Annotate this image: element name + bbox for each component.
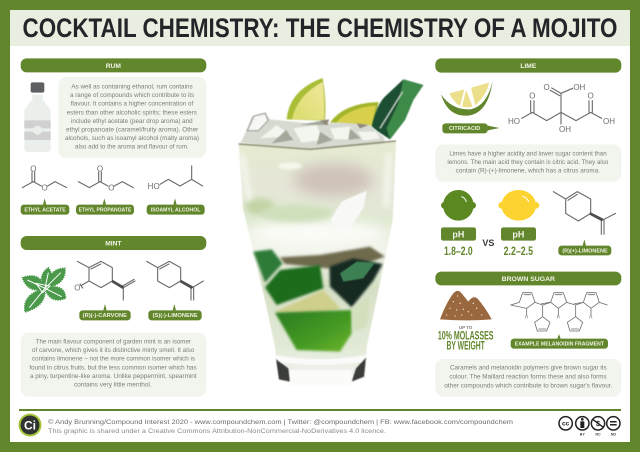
brown sugar heading: [435, 272, 621, 285]
pH badge: lime: [441, 227, 476, 258]
molecule: ethyl acetate: [22, 164, 67, 193]
rum heading: [21, 58, 206, 72]
callout: molasses: UP TO: [459, 325, 472, 331]
rum text block: [58, 77, 206, 158]
molecule: citric acid: [508, 83, 615, 134]
mint text block: The main flavour component of garden mint is an isomer: [36, 339, 191, 345]
rum text block: flavour. It contains a higher concentration of: [71, 102, 194, 108]
icon: rum bottle: [24, 82, 51, 152]
logo: compound interest: [18, 414, 42, 436]
label: (S)-(-)-limonene: (S)(-)-LIMONENE: [153, 313, 198, 319]
mint text block: found in citrus fruits, but the less common isomer which has: [29, 365, 197, 371]
molecule: (S)-(-)-limonene: [147, 261, 203, 300]
label: example melanoidin fragment: EXAMPLE MELANOIDIN FRAGMENT: [515, 341, 605, 347]
brown sugar text block: [435, 359, 621, 397]
label: (S)-(-)-limonene: [148, 304, 202, 320]
molecule: citric acid: HO: [508, 117, 520, 126]
pH badge: lemon: [501, 227, 536, 258]
molecule: carvone: [74, 261, 135, 300]
glass base: [275, 355, 366, 386]
label: (R)-(-)-carvone: [79, 304, 131, 320]
rum text block: include ethyl acetate (pear drop aroma) and: [71, 119, 193, 125]
icons: creative commons licence: $: [596, 419, 601, 428]
brown sugar heading: BROWN SUGAR: [502, 276, 555, 283]
molecule: ethyl propanoate: O: [108, 184, 114, 193]
pH badge: lime: 1.8–2.0: [444, 244, 473, 258]
molecule: ethyl propanoate: O: [97, 164, 103, 173]
molecule: carvone: O: [74, 283, 80, 292]
drink highlights: [242, 153, 389, 246]
brown sugar text block: other compounds which contribute to brown sugar's flavour.: [444, 383, 613, 389]
icon: lemon fruit: [498, 190, 539, 221]
rum text block: a range of compounds which contribute to its: [70, 93, 194, 99]
pH badge: lemon: pH: [512, 229, 524, 239]
icons: creative commons licence: BY: [580, 433, 585, 437]
crushed ice: [239, 113, 396, 149]
lime heading: [435, 58, 621, 73]
label: citric acid: CITRICACID: [449, 126, 481, 132]
panel: lime: [435, 58, 621, 258]
label: citric acid: [442, 123, 499, 133]
mint text block: contains limonene – not the more common isomer which is: [32, 357, 195, 363]
icons: creative commons licence: ND: [611, 433, 616, 437]
molecule: citric acid: OH: [559, 125, 571, 134]
panel: rum: [21, 58, 206, 215]
mint text block: of carvone, which gives it its distinctive minty smell. It also: [32, 348, 195, 354]
label: (R)-(-)-carvone: (R)(-)-CARVONE: [83, 313, 128, 319]
footer rule: [19, 409, 621, 411]
molecule: melanoidin fragment: R: [525, 315, 529, 320]
callout: molasses: 10% MOLASSES: [438, 330, 494, 343]
footer credits: This graphic is shared under a Creative Commons Attribution-NonCommercial-NoDerivatives 4.0 licence.: [48, 428, 386, 435]
molecule: melanoidin fragment: [511, 293, 607, 331]
label: ethyl propanoate: ETHYL PROPANOATE: [79, 207, 132, 213]
rum text block: also add to the aroma and flavour of rum.: [75, 145, 189, 151]
molecule: melanoidin fragment: R: [557, 315, 561, 320]
icon: lime fruit: [441, 190, 476, 221]
molecule: isoamyl alcohol: HO: [148, 182, 160, 191]
label: (R)-(+)-limonene: [558, 239, 611, 255]
callout: molasses: [438, 325, 494, 352]
mint sprig: [372, 79, 423, 139]
label: example melanoidin fragment: [511, 334, 608, 349]
icon: sugar piles: [440, 291, 492, 320]
lime heading: LIME: [520, 63, 537, 70]
mint text block: a piny, turpentine-like aroma. Unlike peppermint, spearmint: [30, 374, 197, 380]
label: (R)-(+)-limonene: (R)(+)-LIMONENE: [562, 248, 608, 254]
rum text block: alcohols, such as isoamyl alcohol (malty aroma): [65, 136, 199, 142]
icon: mint leaves: [22, 268, 66, 312]
molecule: citric acid: O: [544, 83, 550, 92]
rum text block: As well as containing ethanol, rum contains: [71, 84, 193, 90]
molecule: isoamyl alcohol: [148, 166, 203, 191]
logo: compound interest: Ci: [24, 418, 36, 432]
label: ethyl acetate: ETHYL ACETATE: [24, 207, 66, 213]
lime text block: contain (R)-(+)-limonene, which has a citrus aroma.: [456, 169, 600, 175]
lime text block: [435, 144, 621, 182]
icons: creative commons licence: NC: [595, 433, 601, 437]
text: vs: VS: [482, 238, 494, 248]
icons: creative commons licence: cc: [562, 421, 570, 428]
icons: creative commons licence: [559, 417, 620, 437]
label: isoamyl alcohol: ISOAMYL ALCOHOL: [151, 207, 200, 213]
lime text block: lemons. The main acid they contain is citric acid. They also: [447, 160, 609, 166]
rum text block: ethyl propanoate (caramel/fruity aroma). Other: [66, 127, 198, 133]
icon: lime wedge: [441, 81, 493, 116]
label: ethyl acetate: [21, 198, 69, 215]
footer credits: [48, 418, 514, 435]
molecule: citric acid: O: [529, 92, 535, 101]
brown sugar text block: Caramels and melanoidin polymers give brown sugar its: [450, 366, 607, 372]
molecule: citric acid: O: [588, 92, 594, 101]
mint text block: contains very little menthol.: [74, 383, 152, 389]
molecule: (R)-(+)-limonene: [553, 192, 616, 234]
brown sugar text block: colour. The Maillard reaction forms these and also forms: [449, 375, 607, 381]
label: ethyl propanoate: [76, 198, 134, 215]
molecule: ethyl acetate: O: [42, 184, 48, 193]
panel: mint: [21, 236, 206, 397]
mint text block: [21, 333, 206, 397]
mint heading: [21, 236, 206, 250]
molecule: ethyl propanoate: [78, 164, 133, 193]
molecule: melanoidin fragment: R: [589, 315, 593, 320]
pH badge: lemon: 2.2–2.5: [504, 244, 533, 258]
molecule: citric acid: OH: [603, 117, 615, 126]
pH badge: lime: pH: [452, 229, 464, 239]
muddled mint and lime: [253, 247, 385, 352]
lime wedges: [287, 78, 379, 126]
lime text block: Limes have a higher acidity and lower sugar content than: [449, 151, 607, 157]
label: isoamyl alcohol: [147, 198, 205, 215]
footer credits: © Andy Brunning/Compound Interest 2020 - www.compoundchem.com | Twitter: @compoundchem | FB: www.facebook.com/compoundchem: [48, 418, 514, 426]
rum text block: esters than other alcoholic spirits; these esters: [67, 110, 197, 116]
callout: molasses: BY WEIGHT: [446, 339, 485, 352]
glass body: [239, 142, 396, 384]
molecule: citric acid: OH: [573, 83, 586, 92]
panel: brown sugar: [435, 272, 621, 397]
illustration: mojito glass: [239, 78, 423, 386]
mint heading: MINT: [105, 241, 121, 248]
molecule: ethyl acetate: O: [30, 164, 36, 173]
rum heading: RUM: [106, 63, 121, 70]
